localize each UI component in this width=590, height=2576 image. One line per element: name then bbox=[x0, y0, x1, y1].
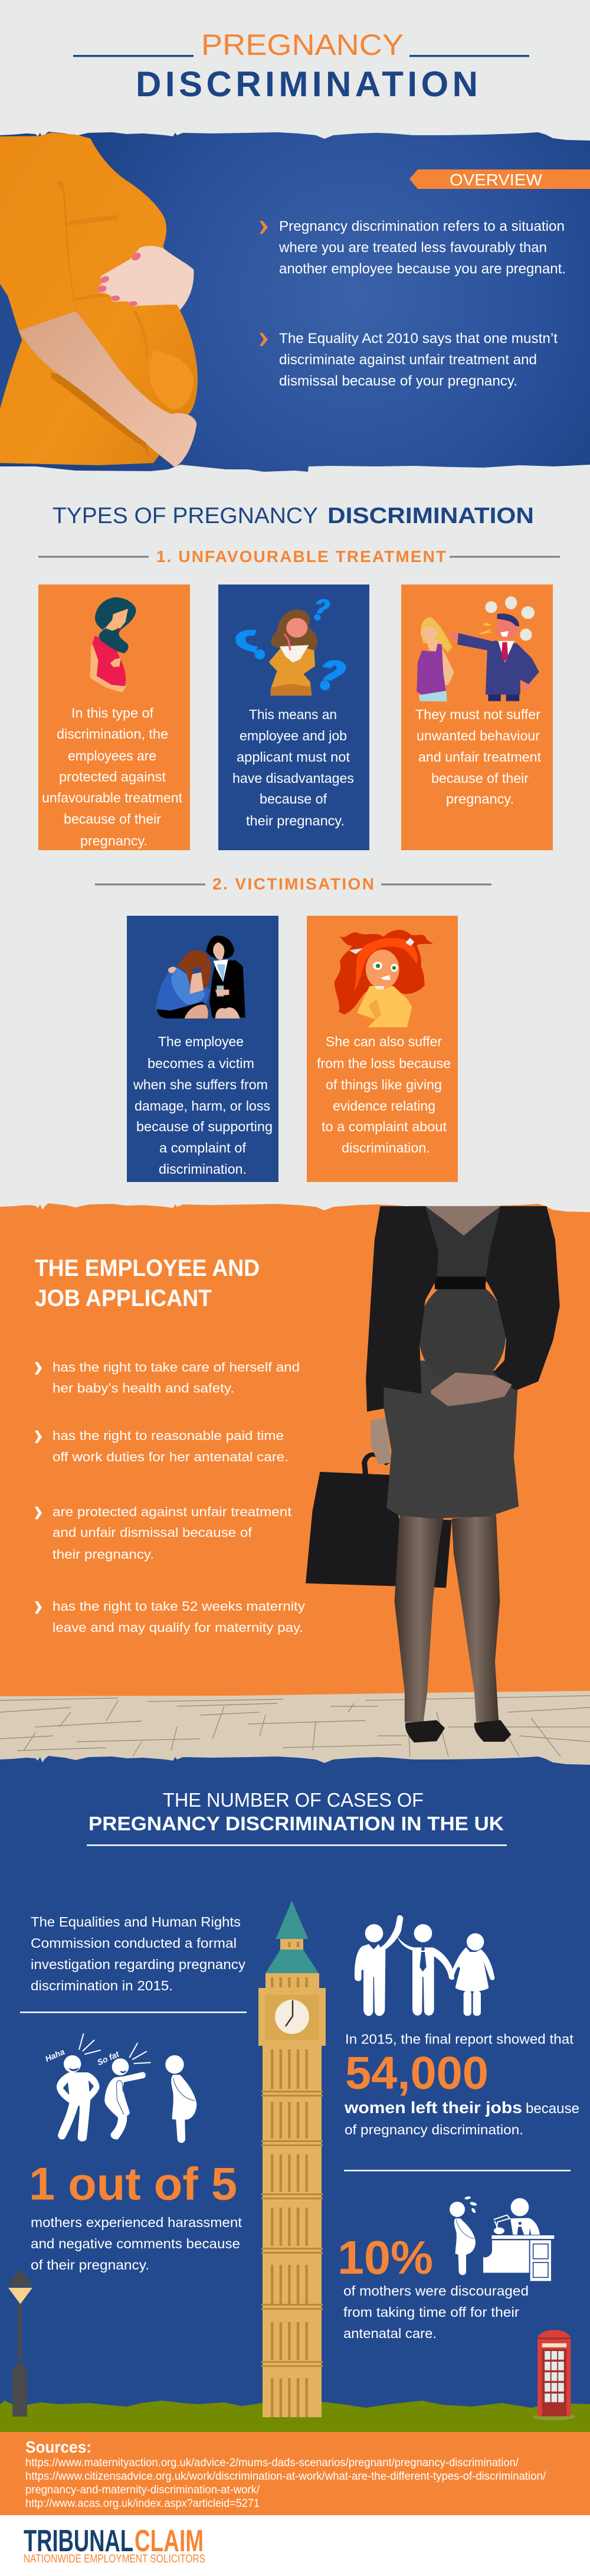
source links: http://www.acas.org.uk/index.aspx?articleid=5271 bbox=[25, 2497, 260, 2510]
panel: card 1 bbox=[38, 585, 190, 850]
icon: woman comforting crying colleague bbox=[156, 936, 245, 1018]
text: The employee bbox=[158, 1034, 244, 1049]
icon: street lamp bbox=[8, 2268, 33, 2417]
overview paragraph 2: discriminate against unfair treatment and bbox=[279, 352, 537, 368]
text: when she suffers from bbox=[133, 1077, 268, 1092]
panel: victim card 1 bbox=[127, 916, 278, 1182]
title: PREGNANCY bbox=[201, 28, 404, 61]
brick floor bbox=[0, 1691, 590, 1771]
icon: people high five bbox=[355, 1915, 494, 2016]
right 3: their pregnancy. bbox=[53, 1547, 154, 1562]
text: because of their bbox=[431, 770, 529, 786]
heading: THE EMPLOYEE AND bbox=[35, 1255, 260, 1281]
text: to a complaint about bbox=[322, 1119, 447, 1134]
photo: pregnant woman in orange dress bbox=[0, 132, 198, 468]
footer white background bbox=[0, 2515, 590, 2576]
logo: tribunal claim: TRIBUNAL bbox=[24, 2524, 133, 2558]
green ground bbox=[0, 2401, 590, 2433]
text: becomes a victim bbox=[148, 1056, 254, 1071]
overview tab bbox=[409, 169, 590, 189]
heading bbox=[35, 1255, 260, 1311]
icon: stressed red-haired woman bbox=[335, 930, 433, 1027]
overview paragraph 2 bbox=[279, 331, 558, 389]
icon: people mocking pregnant woman: Haha bbox=[44, 2046, 66, 2064]
stat: 54,000 bbox=[344, 2031, 579, 2172]
heading bbox=[87, 1789, 507, 1846]
text: investigation bbox=[20, 1914, 247, 2013]
heading: victimisation: 2. VICTIMISATION bbox=[212, 875, 374, 893]
overview paragraph 2: The Equality Act 2010 says that one mustn’t bbox=[279, 331, 558, 347]
sources heading: Sources: bbox=[25, 2438, 91, 2456]
heading: types of pregnancy discrimination: DISCRIMINATION bbox=[327, 504, 534, 528]
icon: people mocking pregnant woman bbox=[44, 2033, 196, 2143]
heading: unfavourable treatment bbox=[38, 547, 560, 566]
heading: victimisation bbox=[95, 875, 491, 893]
panel: number of cases bbox=[0, 1756, 590, 2433]
stat: 1 out of 5: and negative comments because bbox=[31, 2236, 240, 2251]
overview paragraph 1 bbox=[278, 218, 566, 277]
text: employees are bbox=[68, 748, 156, 763]
stat: 10%: from taking time off for their bbox=[343, 2304, 519, 2320]
text: a complaint of bbox=[159, 1140, 247, 1155]
text: investigation: investigation regarding pregnancy bbox=[31, 1957, 245, 1972]
text bbox=[232, 707, 354, 828]
right 2: has the right to reasonable paid time bbox=[53, 1428, 284, 1443]
overview paragraph 1: where you are treated less favourably than bbox=[278, 240, 547, 256]
right 4: leave and may qualify for maternity pay. bbox=[53, 1620, 303, 1635]
icon: angry boss pointing at pregnant woman bbox=[417, 596, 539, 701]
right 1: has the right to take care of herself and bbox=[53, 1360, 300, 1374]
stat: 1 out of 5 bbox=[29, 2157, 242, 2273]
logo: tribunal claim: NATIONWIDE EMPLOYMENT SOLICITORS bbox=[24, 2553, 205, 2565]
text: discrimination, the bbox=[57, 726, 168, 742]
stat: 10%: 10% bbox=[337, 2231, 433, 2284]
shoes bbox=[405, 1720, 511, 1742]
text: from the loss because bbox=[317, 1056, 451, 1071]
heading: unfavourable treatment: 1. UNFAVOURABLE TREATMENT bbox=[156, 547, 446, 566]
heading: PREGNANCY DISCRIMINATION IN THE UK bbox=[88, 1813, 504, 1834]
text: This means an bbox=[249, 707, 337, 722]
source links bbox=[25, 2456, 546, 2510]
stat: 54,000: women left their jobs bbox=[344, 2098, 522, 2117]
right 1: her baby’s health and safety. bbox=[53, 1380, 234, 1396]
stat: 54,000: 54,000 bbox=[345, 2046, 489, 2098]
chevron bbox=[260, 221, 268, 234]
title bbox=[73, 28, 529, 104]
icon: confused woman with question marks bbox=[240, 600, 342, 696]
right 1 bbox=[35, 1360, 300, 1396]
heading: types of pregnancy discrimination bbox=[53, 504, 534, 528]
stat: 10%: antenatal care. bbox=[343, 2326, 437, 2341]
panel: card 2 bbox=[218, 585, 369, 850]
text: because of supporting bbox=[136, 1119, 273, 1134]
text: and unfair treatment bbox=[418, 749, 542, 765]
stat: 10% bbox=[337, 2231, 529, 2341]
text: of things like giving bbox=[326, 1077, 442, 1092]
text: damage, harm, or loss bbox=[135, 1098, 270, 1114]
right 4: has the right to take 52 weeks maternity bbox=[53, 1599, 305, 1614]
text: protected against bbox=[59, 769, 166, 784]
text bbox=[42, 705, 183, 848]
logo: tribunal claim: CLAIM bbox=[135, 2524, 204, 2558]
icon: pregnant woman and manager at desk bbox=[450, 2196, 554, 2281]
text: unwanted behaviour bbox=[417, 728, 540, 743]
heading: THE NUMBER OF CASES OF bbox=[163, 1789, 424, 1811]
text: because of bbox=[260, 791, 327, 807]
text: employee and job bbox=[240, 728, 347, 743]
overview paragraph 2: dismissal because of your pregnancy. bbox=[279, 373, 517, 389]
stat: 1 out of 5: 1 out of 5 bbox=[29, 2157, 237, 2209]
panel: card 3 bbox=[401, 585, 553, 850]
icon: pregnant woman in red bbox=[90, 598, 136, 693]
panel: overview bbox=[0, 132, 590, 472]
text bbox=[317, 1034, 451, 1155]
torn orange background bbox=[0, 1203, 590, 1700]
heading: types of pregnancy discrimination: TYPES OF PREGNANCY bbox=[53, 504, 318, 528]
text: investigation: discrimination in 2015. bbox=[31, 1978, 173, 1993]
text: applicant must not bbox=[237, 749, 350, 765]
text: investigation: Commission conducted a formal bbox=[31, 1935, 237, 1951]
text bbox=[133, 1034, 273, 1177]
text: She can also suffer bbox=[326, 1034, 442, 1049]
text: They must not suffer bbox=[415, 707, 540, 722]
text: unfavourable treatment bbox=[42, 790, 183, 805]
panel: sources bbox=[0, 2432, 590, 2515]
right 3 bbox=[35, 1504, 291, 1562]
torn blue background bbox=[0, 132, 590, 472]
text: discrimination. bbox=[342, 1140, 430, 1155]
source links: pregnancy-and-maternity-discrimination-at-work/ bbox=[25, 2483, 260, 2496]
icon: big ben tower bbox=[258, 1901, 326, 2417]
text: pregnancy. bbox=[80, 833, 148, 848]
text: because of their bbox=[64, 811, 161, 827]
stat: 10%: of mothers were discouraged bbox=[343, 2283, 529, 2299]
panel: employee and job applicant bbox=[0, 1203, 590, 1771]
right 3: and unfair dismissal because of bbox=[53, 1525, 253, 1540]
photo: pregnant woman in black suit with bag bbox=[306, 1206, 560, 1722]
overview paragraph 1: another employee because you are pregnant. bbox=[279, 261, 566, 277]
right 2 bbox=[35, 1428, 289, 1464]
text: In this type of bbox=[71, 705, 154, 720]
chevron bbox=[260, 333, 268, 346]
torn blue background bbox=[0, 1756, 590, 2433]
stat: 54,000: of pregnancy discrimination. bbox=[345, 2122, 523, 2137]
overview paragraph 1: Pregnancy discrimination refers to a situation bbox=[279, 218, 565, 234]
right 3: are protected against unfair treatment bbox=[53, 1504, 291, 1519]
text: evidence relating bbox=[333, 1098, 435, 1114]
icon: red telephone box bbox=[533, 2330, 575, 2420]
text: investigation: The Equalities and Human Rights bbox=[31, 1914, 241, 1929]
source links: https://www.citizensadvice.org.uk/work/discrimination-at-work/what-are-the-different-types-of-discrimination/ bbox=[25, 2470, 546, 2483]
source links: https://www.maternityaction.org.uk/advice-2/mums-dads-scenarios/pregnant/pregnancy-discrimination/ bbox=[25, 2456, 519, 2469]
overview label: OVERVIEW bbox=[450, 171, 543, 189]
text: discrimination. bbox=[159, 1161, 247, 1177]
icon: people mocking pregnant woman: So fat bbox=[96, 2049, 121, 2067]
text bbox=[415, 707, 542, 807]
text: pregnancy. bbox=[446, 791, 514, 807]
text: have disadvantages bbox=[232, 770, 354, 786]
right 2: off work duties for her antenatal care. bbox=[53, 1449, 289, 1464]
panel: victim card 2 bbox=[307, 916, 458, 1182]
stat: 54,000: In 2015, the final report showed that bbox=[345, 2031, 573, 2046]
heading: JOB APPLICANT bbox=[35, 1285, 212, 1311]
stat: 1 out of 5: of their pregnancy. bbox=[31, 2257, 149, 2273]
stat: 54,000: because bbox=[526, 2101, 579, 2117]
right 4 bbox=[35, 1599, 305, 1635]
title: DISCRIMINATION bbox=[136, 64, 478, 104]
stat: 1 out of 5: mothers experienced harassment bbox=[31, 2215, 242, 2230]
text: their pregnancy. bbox=[246, 813, 345, 828]
